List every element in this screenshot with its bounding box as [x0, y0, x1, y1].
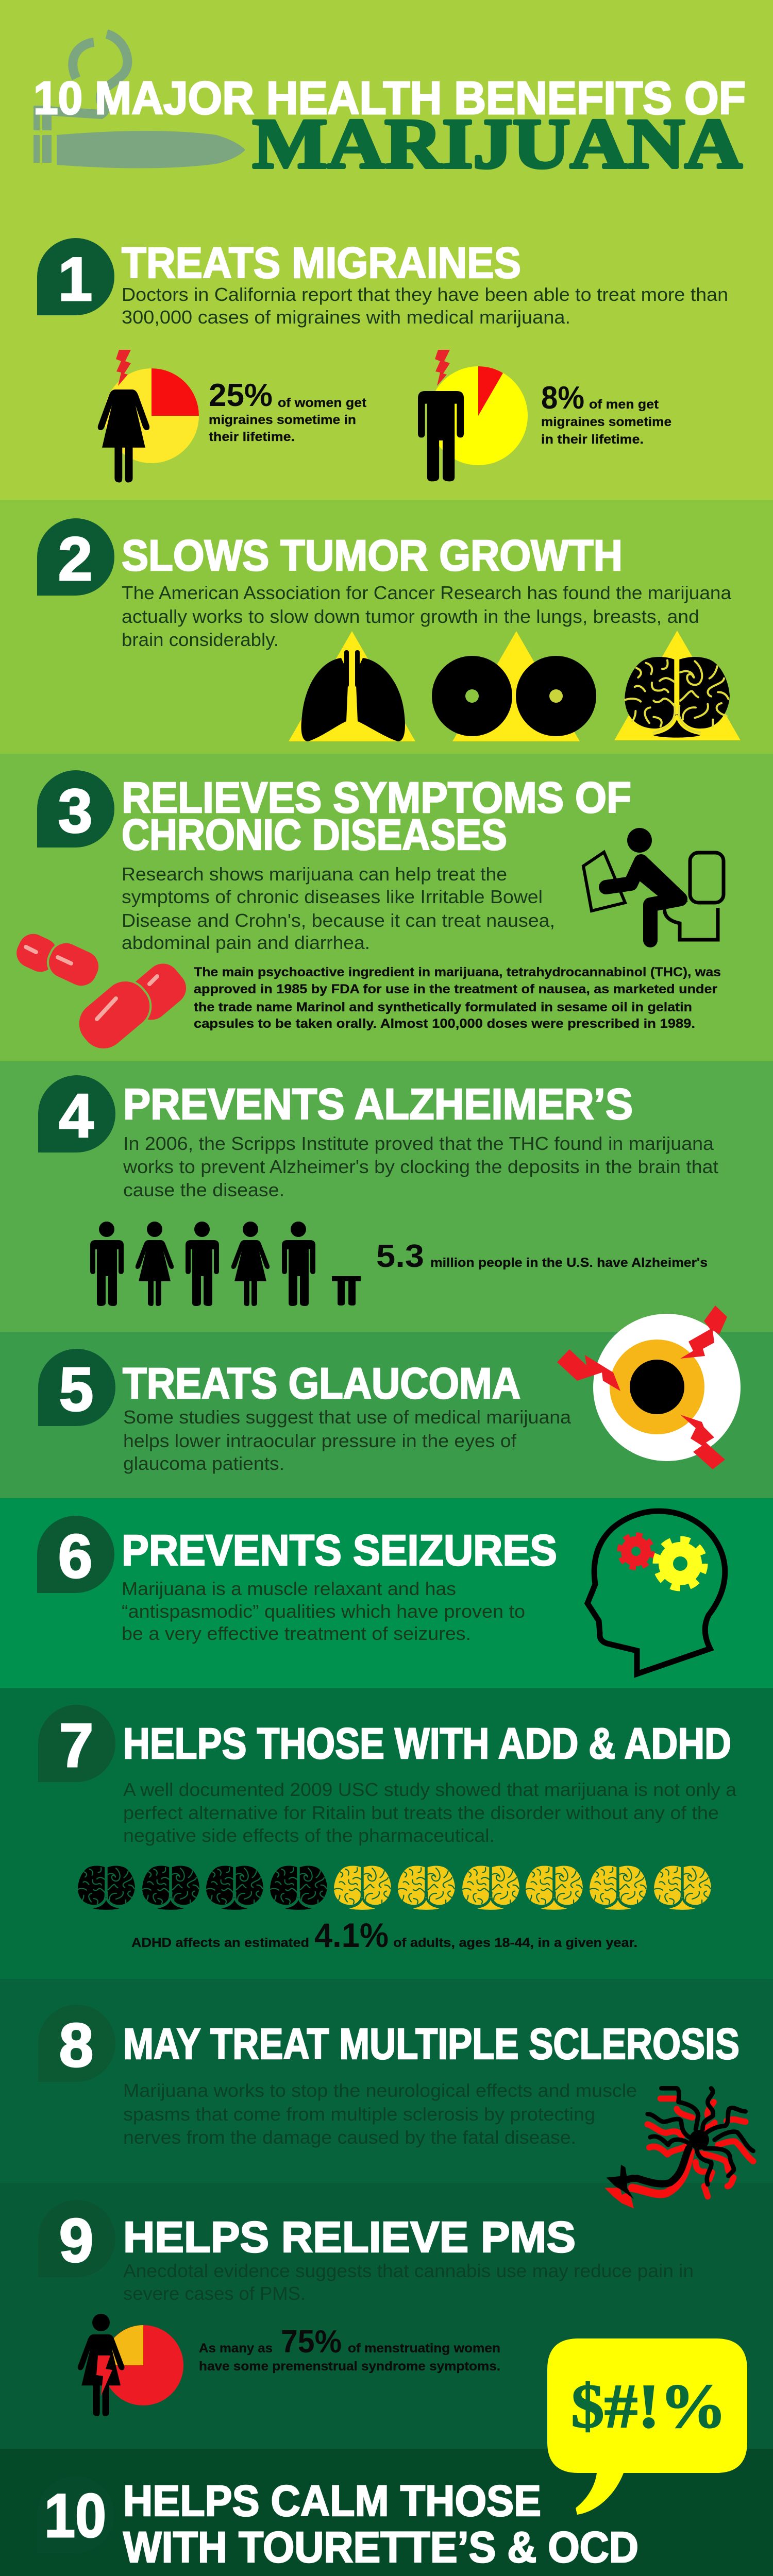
body 5: glaucoma patients.	[123, 1453, 284, 1474]
badge 3	[37, 770, 114, 848]
body 2	[122, 582, 732, 650]
icon: joint with smoke	[33, 34, 245, 168]
body 8: spasms that come from multiple sclerosis by protecting	[123, 2104, 595, 2125]
heading 3: RELIEVES SYMPTOMS OF	[122, 773, 631, 822]
panel: section 3 chronic diseases	[0, 754, 773, 1061]
body 6	[122, 1578, 525, 1644]
panel: section 7 ADD and ADHD	[0, 1688, 773, 1979]
panel: section 5 glaucoma	[0, 1306, 773, 1498]
body 8: Marijuana works to stop the neurological effects and muscle	[123, 2080, 637, 2101]
body 9: Anecdotal evidence suggests that cannabis use may reduce pain in	[123, 2260, 694, 2281]
pictogram: row of ten brains	[78, 1866, 711, 1910]
speech bubble with swearing symbols: $#!%	[571, 2371, 727, 2441]
badge 5: 5	[59, 1355, 93, 1424]
stat: 75% of women: of menstruating women	[348, 2341, 500, 2355]
stat: 8% of men: migraines sometime	[541, 415, 671, 429]
body 5	[123, 1406, 572, 1474]
title line 1: 10 MAJOR HEALTH BENEFITS OF	[33, 73, 746, 124]
heading 4: PREVENTS ALZHEIMER’S	[123, 1080, 633, 1128]
body 7: negative side effects of the pharmaceutical.	[123, 1825, 495, 1846]
badge 9	[38, 2200, 115, 2277]
chart: PMS pie with woman	[78, 2314, 183, 2416]
stat: 4.1% of adults	[131, 1916, 637, 1954]
body 4: In 2006, the Scripps Institute proved that the THC found in marijuana	[123, 1133, 714, 1154]
badge 5	[38, 1349, 115, 1426]
stat: 25% of women: of women get	[278, 396, 367, 410]
stat: 8% of men	[541, 380, 671, 447]
badge 7: 7	[59, 1711, 93, 1780]
stat: 8% of men: in their lifetime.	[541, 432, 644, 447]
badge 1: 1	[58, 245, 92, 314]
badge 2: 2	[58, 524, 92, 594]
body 5: Some studies suggest that use of medical marijuana	[123, 1406, 572, 1428]
heading 6: PREVENTS SEIZURES	[122, 1526, 557, 1574]
panel: section 9 PMS	[0, 2183, 773, 2449]
body 7: perfect alternative for Ritalin but treats the disorder without any of the	[123, 1802, 719, 1823]
stat: 25% of women: 25%	[209, 378, 273, 413]
icon: nerve cell	[604, 2088, 753, 2209]
icon: head with gears	[587, 1511, 725, 1674]
stat: 75% of women: As many as	[199, 2341, 273, 2355]
body 8	[123, 2080, 637, 2148]
badge 1	[37, 238, 114, 315]
small text: THC note	[194, 965, 721, 1031]
body 1: Doctors in California report that they have been able to treat more than	[122, 284, 728, 305]
body 5: helps lower intraocular pressure in the eyes of	[123, 1430, 517, 1451]
body 3: Disease and Crohn's, because it can treat nausea,	[122, 910, 555, 931]
badge 3: 3	[58, 776, 92, 845]
body 7	[123, 1779, 737, 1846]
small text: THC note: the trade name Marinol and synthetically formulated in sesame oil in gelatin	[194, 1000, 692, 1014]
icon: breasts on triangle	[432, 631, 596, 741]
panel: header and section 1 band	[0, 0, 773, 500]
stat: 75% of women: have some premenstrual syndrome symptoms.	[199, 2359, 500, 2374]
panel: section 10 Tourette's and OCD	[0, 2449, 773, 2576]
stat: 8% of men: 8%	[541, 380, 584, 416]
icon: red capsules	[12, 929, 193, 1059]
stat: 5.3 million: 5.3	[376, 1239, 424, 1274]
stat: 25% of women: migraines sometime in	[209, 413, 356, 427]
badge 8: 8	[59, 2011, 93, 2080]
body 1: 300,000 cases of migraines with medical marijuana.	[122, 307, 570, 328]
stat: 8% of men: of men get	[589, 397, 659, 412]
body 2: The American Association for Cancer Research has found the marijuana	[122, 582, 732, 603]
chart: women migraine pie with figure	[98, 350, 199, 482]
body 8: nerves from the damage caused by the fatal disease.	[123, 2127, 576, 2148]
stat: 25% of women	[209, 378, 367, 444]
icon: lungs on triangle	[289, 631, 415, 741]
icon: person reading on toilet	[583, 828, 724, 940]
icon: eye with lightning	[557, 1306, 741, 1469]
body 3: Research shows marijuana can help treat the	[122, 863, 507, 885]
stat: 4.1% of adults: 4.1%	[314, 1916, 389, 1954]
heading 2: SLOWS TUMOR GROWTH	[122, 531, 623, 580]
stat: 25% of women: their lifetime.	[209, 430, 295, 444]
body 4: cause the disease.	[123, 1179, 284, 1200]
badge 6: 6	[58, 1522, 92, 1591]
stat: 4.1% of adults: of adults, ages 18-44, in a given year.	[393, 1936, 637, 1950]
body 9: severe cases of PMS.	[123, 2283, 306, 2304]
panel: section 6 seizures	[0, 1498, 773, 1688]
panel: section 8 multiple sclerosis	[0, 1979, 773, 2183]
body 3: abdominal pain and diarrhea.	[122, 932, 370, 953]
badge 6	[37, 1516, 114, 1593]
stat: 5.3 million: million people in the U.S. have Alzheimer's	[430, 1256, 708, 1270]
body 2: brain considerably.	[122, 629, 279, 650]
heading 3: CHRONIC DISEASES	[122, 810, 507, 859]
heading 10: HELPS CALM THOSE	[123, 2477, 541, 2525]
stat: 4.1% of adults: ADHD affects an estimated	[131, 1936, 309, 1950]
body 4	[123, 1133, 718, 1200]
body 6: “antispasmodic” qualities which have proven to	[122, 1601, 525, 1622]
heading 10	[123, 2477, 638, 2571]
small text: THC note: approved in 1985 by FDA for use in the treatment of nausea, as marketed under	[194, 982, 717, 996]
stat: 75% of women: 75%	[281, 2324, 342, 2360]
body 3: symptoms of chronic diseases like Irritable Bowel	[122, 886, 543, 907]
speech bubble with swearing symbols	[547, 2338, 747, 2515]
heading 5: TREATS GLAUCOMA	[123, 1359, 520, 1408]
badge 2	[37, 518, 114, 596]
body 7: A well documented 2009 USC study showed that marijuana is not only a	[123, 1779, 737, 1800]
body 6: be a very effective treatment of seizures.	[122, 1623, 471, 1644]
heading 1: TREATS MIGRAINES	[122, 239, 521, 287]
badge 10: 10	[44, 2481, 106, 2550]
heading 10: WITH TOURETTE’S & OCD	[123, 2523, 638, 2571]
chart: men migraine pie with figure	[418, 350, 528, 481]
panel: section 4 Alzheimer's	[0, 1061, 773, 1332]
panel: section 2 tumor growth	[0, 500, 773, 754]
body 6: Marijuana is a muscle relaxant and has	[122, 1578, 456, 1599]
small text: THC note: The main psychoactive ingredient in marijuana, tetrahydrocannabinol (THC), was	[194, 965, 721, 979]
heading 9: HELPS RELIEVE PMS	[123, 2213, 576, 2261]
icon: brain on triangle	[614, 631, 741, 740]
badge 9: 9	[59, 2206, 93, 2275]
pictogram: 5.3 people	[90, 1222, 361, 1306]
body 9	[123, 2260, 694, 2304]
title line 2: MARIJUANA	[253, 104, 742, 183]
badge 7	[38, 1705, 115, 1782]
body 4: works to prevent Alzheimer's by clocking the deposits in the brain that	[123, 1156, 718, 1177]
badge 4: 4	[59, 1081, 94, 1150]
small text: THC note: capsules to be taken orally. Almost 100,000 doses were prescribed in 1989.	[194, 1016, 695, 1031]
badge 8	[38, 2005, 115, 2082]
body 3	[122, 863, 555, 953]
body 1	[122, 284, 728, 328]
badge 4	[38, 1075, 115, 1153]
body 2: actually works to slow down tumor growth in the lungs, breasts, and	[122, 606, 699, 627]
heading 3	[122, 773, 631, 859]
stat: 75% of women	[199, 2324, 500, 2374]
stat: 5.3 million	[376, 1239, 708, 1274]
